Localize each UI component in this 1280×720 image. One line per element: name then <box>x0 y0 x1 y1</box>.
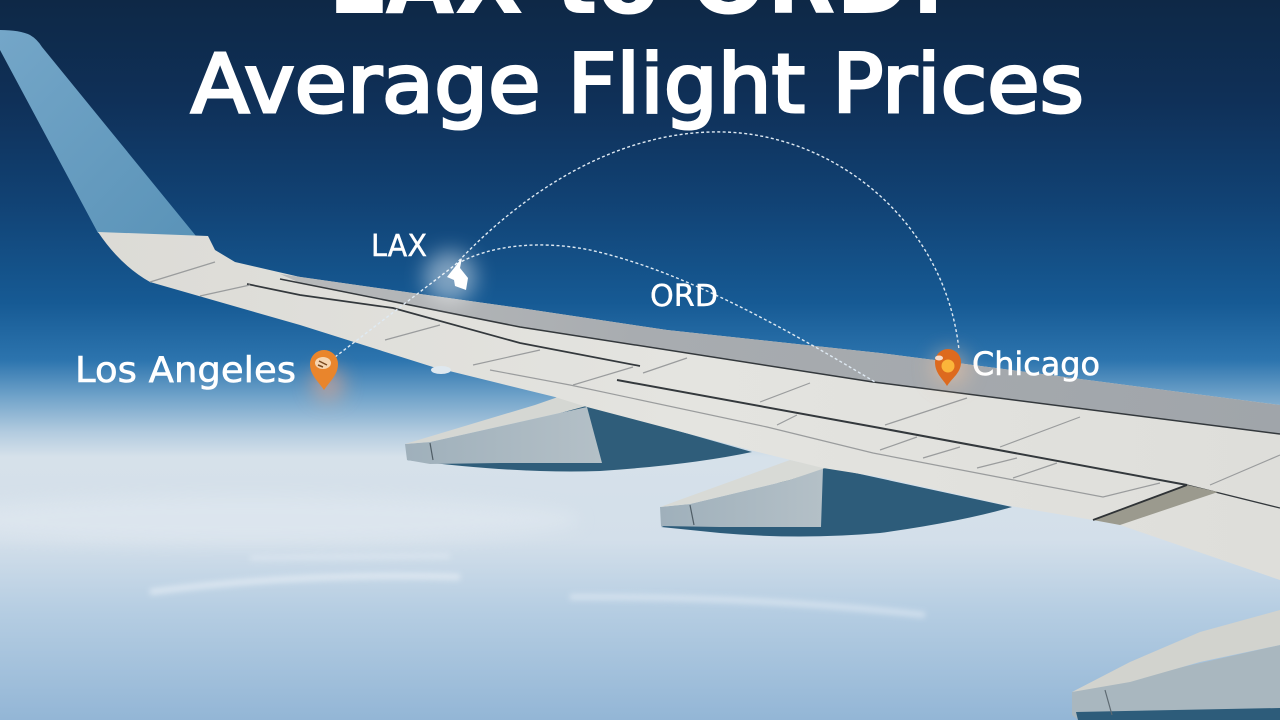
wispy clouds <box>0 496 925 615</box>
flight routes <box>335 132 959 382</box>
wing surface <box>98 232 1280 580</box>
icon: plane glow <box>424 251 476 303</box>
structural lines <box>247 279 1280 508</box>
title: Average Flight Prices <box>191 38 1084 132</box>
panel lines <box>150 262 1280 497</box>
icon: Los Angeles pin <box>310 350 344 400</box>
flap fairing 1 <box>405 397 752 472</box>
flap fairing 2 <box>660 460 1012 536</box>
far flap fairing, lower right <box>1072 610 1280 720</box>
main wing <box>98 232 1280 580</box>
label: Los Angeles: Los Angeles <box>75 350 296 391</box>
label: ORD: ORD <box>650 279 718 314</box>
icon: Chicago pin <box>932 349 968 386</box>
label: LAX: LAX <box>371 229 427 264</box>
small wing edge highlight <box>431 366 451 374</box>
leading edge strip <box>280 274 1280 434</box>
title <box>191 0 1084 132</box>
flap track stripe <box>1093 485 1218 525</box>
label: Chicago: Chicago <box>972 345 1100 383</box>
winglet <box>0 30 196 236</box>
